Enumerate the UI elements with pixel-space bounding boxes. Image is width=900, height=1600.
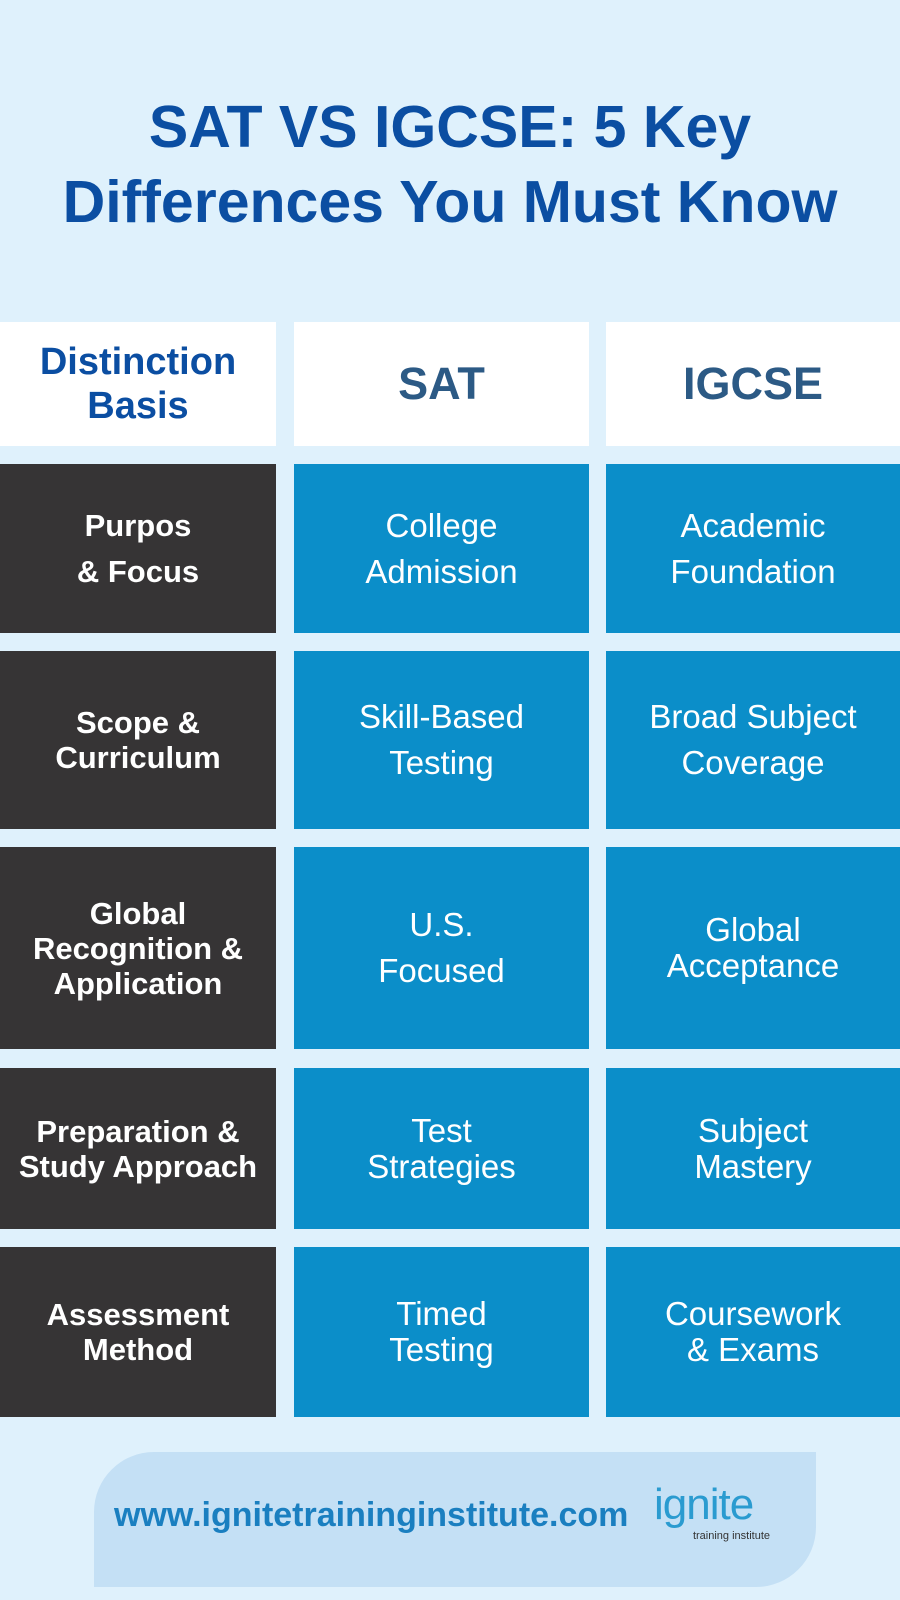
row 2 label <box>0 651 276 829</box>
row 1 label <box>0 464 276 633</box>
row 1 SAT <box>294 464 589 633</box>
row 3 SAT: Focused <box>378 952 505 989</box>
title <box>63 94 838 235</box>
row 5 IGCSE: Coursework <box>665 1295 841 1332</box>
row 1 IGCSE: Foundation <box>670 552 836 590</box>
row 4 label: Preparation & <box>36 1114 240 1148</box>
row 3 IGCSE <box>606 847 900 1049</box>
title: Differences You Must Know <box>63 169 837 235</box>
row 3 SAT: U.S. <box>409 906 474 943</box>
row 5 label: Method <box>83 1332 193 1367</box>
logo <box>654 1480 770 1542</box>
row 4 label: Study Approach <box>19 1148 257 1184</box>
row 2 SAT: Skill-Based <box>359 698 524 735</box>
row 5 IGCSE: & Exams <box>687 1331 819 1368</box>
row 5 label: Assessment <box>47 1297 229 1332</box>
row 3 label: Recognition & <box>33 930 243 966</box>
header: SAT <box>294 322 589 446</box>
row 1 SAT: College <box>386 506 497 544</box>
row 4 label <box>0 1068 276 1229</box>
row 2 IGCSE <box>606 651 900 829</box>
row 4 SAT: Strategies <box>367 1148 516 1184</box>
row 2 SAT: Testing <box>389 744 494 781</box>
row 4 IGCSE: Mastery <box>694 1148 812 1184</box>
row 3 label <box>0 847 276 1049</box>
row 4 SAT: Test <box>411 1112 472 1148</box>
row 3 IGCSE: Global <box>705 911 801 948</box>
row 5 IGCSE <box>606 1247 900 1417</box>
header: IGCSE <box>606 322 900 446</box>
row 2 IGCSE: Broad Subject <box>649 698 857 735</box>
header: distinction basis: Basis <box>87 385 189 427</box>
row 2 label: Scope & <box>76 705 200 740</box>
header: distinction basis <box>0 322 276 446</box>
row 3 SAT <box>294 847 589 1049</box>
row 2 label: Curriculum <box>55 740 221 775</box>
row 5 SAT: Testing <box>389 1331 494 1368</box>
logo: training institute <box>693 1530 770 1542</box>
website url: www.ignitetraininginstitute.com <box>114 1496 628 1534</box>
row 1 label: & Focus <box>77 554 199 588</box>
row 3 IGCSE: Acceptance <box>667 947 839 984</box>
row 1 SAT: Admission <box>365 552 518 590</box>
footer banner <box>94 1452 816 1587</box>
row 2 IGCSE: Coverage <box>681 744 825 781</box>
row 4 IGCSE: Subject <box>698 1112 808 1148</box>
row 1 label: Purpos <box>85 508 191 542</box>
row 2 SAT <box>294 651 589 829</box>
row 5 SAT <box>294 1247 589 1417</box>
header: SAT: SAT <box>398 358 485 409</box>
row 1 IGCSE: Academic <box>681 506 825 544</box>
row 4 SAT <box>294 1068 589 1229</box>
header: IGCSE: IGCSE <box>683 358 823 409</box>
row 3 label: Global <box>90 896 186 930</box>
row 5 SAT: Timed <box>396 1295 487 1332</box>
row 4 IGCSE <box>606 1068 900 1229</box>
logo: ignite <box>654 1480 753 1529</box>
row 5 label <box>0 1247 276 1417</box>
row 3 label: Application <box>54 966 222 1000</box>
header: distinction basis: Distinction <box>40 341 236 383</box>
row 1 IGCSE <box>606 464 900 633</box>
title: SAT VS IGCSE: 5 Key <box>149 94 751 160</box>
